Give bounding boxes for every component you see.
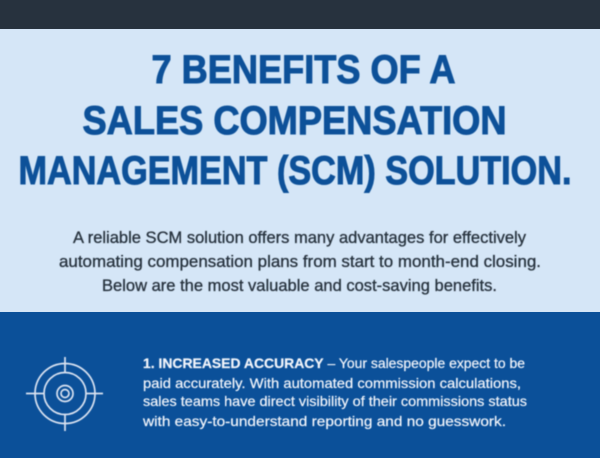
benefit text: with easy-to-understand reporting and no guesswork. xyxy=(142,413,506,429)
intro text: A reliable SCM solution offers many advantages for effectively xyxy=(73,229,527,247)
intro text: Below are the most valuable and cost-saving benefits. xyxy=(102,277,497,295)
icon: target xyxy=(26,357,103,431)
title: SALES COMPENSATION xyxy=(82,99,506,143)
title xyxy=(18,48,572,193)
benefit text: sales teams have direct visibility of their commissions status xyxy=(143,393,527,409)
benefit text xyxy=(142,355,527,429)
benefit text: paid accurately. With automated commission calculations, xyxy=(143,375,521,391)
panel: increased accuracy xyxy=(0,312,600,458)
intro text xyxy=(59,229,541,295)
benefit text: 1. INCREASED ACCURACY – Your salespeople expect to be xyxy=(143,355,525,371)
top dark band xyxy=(0,0,600,29)
intro text: automating compensation plans from start to month-end closing. xyxy=(59,253,541,271)
title: 7 BENEFITS OF A xyxy=(152,48,456,92)
